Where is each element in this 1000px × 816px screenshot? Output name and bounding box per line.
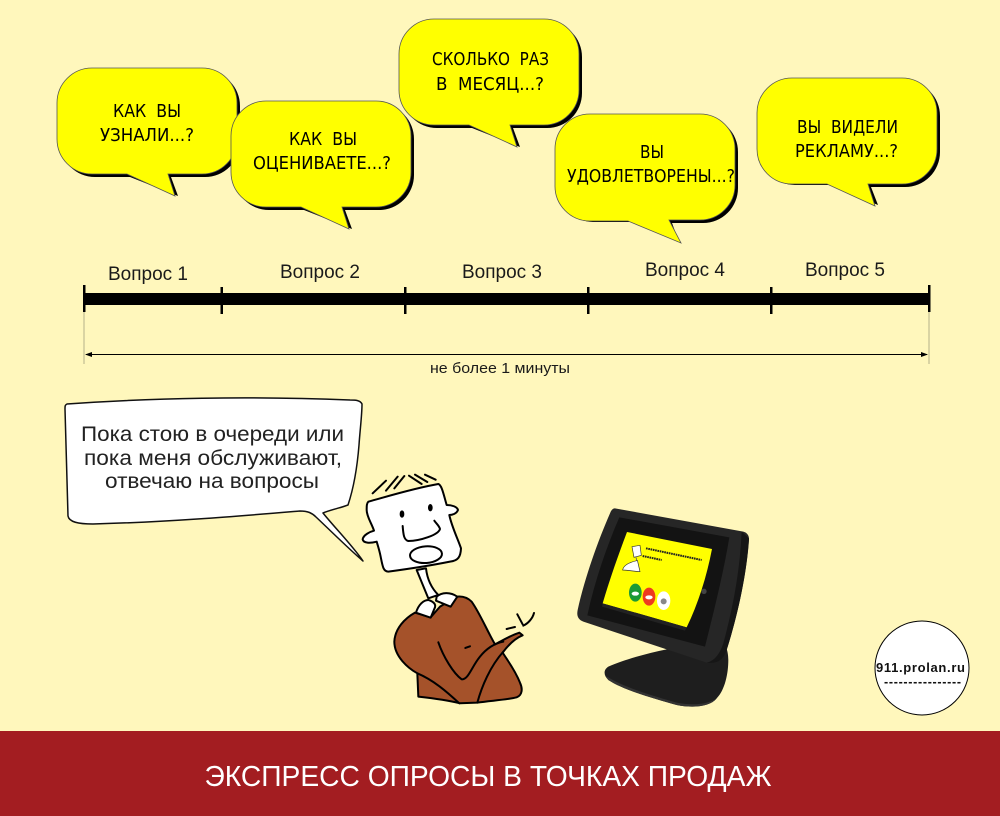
speech bubble: question 4: ВЫ <box>640 142 664 163</box>
kiosk screen <box>602 532 712 631</box>
character arm lines <box>417 642 503 703</box>
customer speech bubble <box>65 398 363 561</box>
question labels: Вопрос 2 <box>280 262 360 283</box>
speech bubble: question 2: КАК ВЫ <box>289 129 357 150</box>
character face <box>401 505 443 564</box>
site badge <box>875 621 969 715</box>
kiosk camera <box>701 589 707 594</box>
customer speech bubble: Пока стою в очереди или <box>81 423 344 446</box>
speech bubble: question 3: СКОЛЬКО РАЗ <box>432 49 549 70</box>
speech bubble: question 3 <box>399 19 582 147</box>
character body <box>394 596 523 703</box>
speech bubble: question 2 <box>231 101 414 229</box>
character hair <box>373 475 436 493</box>
question labels: Вопрос 1 <box>108 264 188 285</box>
speech bubble: question 4 <box>555 114 738 243</box>
speech bubble: question 1 <box>57 68 240 196</box>
speech bubble: question 5: РЕКЛАМУ...? <box>795 141 898 162</box>
character collar <box>416 593 457 618</box>
tablet kiosk <box>577 508 749 707</box>
customer speech bubble: пока меня обслуживают, <box>84 447 342 470</box>
character neck <box>417 568 438 598</box>
footer banner <box>0 731 1000 816</box>
character head <box>363 484 461 572</box>
speech bubble: question 4: УДОВЛЕТВОРЕНЫ...? <box>567 166 735 187</box>
speech bubble: question 1: КАК ВЫ <box>113 101 181 122</box>
duration label: не более 1 минуты <box>430 360 570 377</box>
site badge: 911.prolan.ru <box>876 660 965 675</box>
footer banner: ЭКСПРЕСС ОПРОСЫ В ТОЧКАХ ПРОДАЖ <box>204 761 772 793</box>
question labels: Вопрос 5 <box>805 260 885 281</box>
question labels: Вопрос 4 <box>645 260 725 281</box>
timeline bar <box>83 285 930 314</box>
hand motion marks <box>507 613 534 629</box>
site badge: ---------------- <box>884 675 961 689</box>
speech bubble: question 2: ОЦЕНИВАЕТЕ...? <box>253 153 391 174</box>
screen figure <box>623 545 641 572</box>
duration arrow <box>84 312 929 364</box>
screen buttons <box>629 584 642 602</box>
character <box>363 475 534 703</box>
speech bubble: question 5: ВЫ ВИДЕЛИ <box>797 117 898 138</box>
speech bubble: question 3: В МЕСЯЦ...? <box>436 74 544 95</box>
kiosk body <box>577 508 749 663</box>
question labels <box>108 260 885 285</box>
question labels: Вопрос 3 <box>462 262 542 283</box>
speech bubble: question 1: УЗНАЛИ...? <box>100 125 194 146</box>
kiosk bezel <box>587 517 729 647</box>
customer speech bubble: отвечаю на вопросы <box>105 470 319 493</box>
kiosk stand <box>605 638 728 707</box>
screen question <box>643 548 702 560</box>
speech bubble: question 5 <box>757 78 940 206</box>
